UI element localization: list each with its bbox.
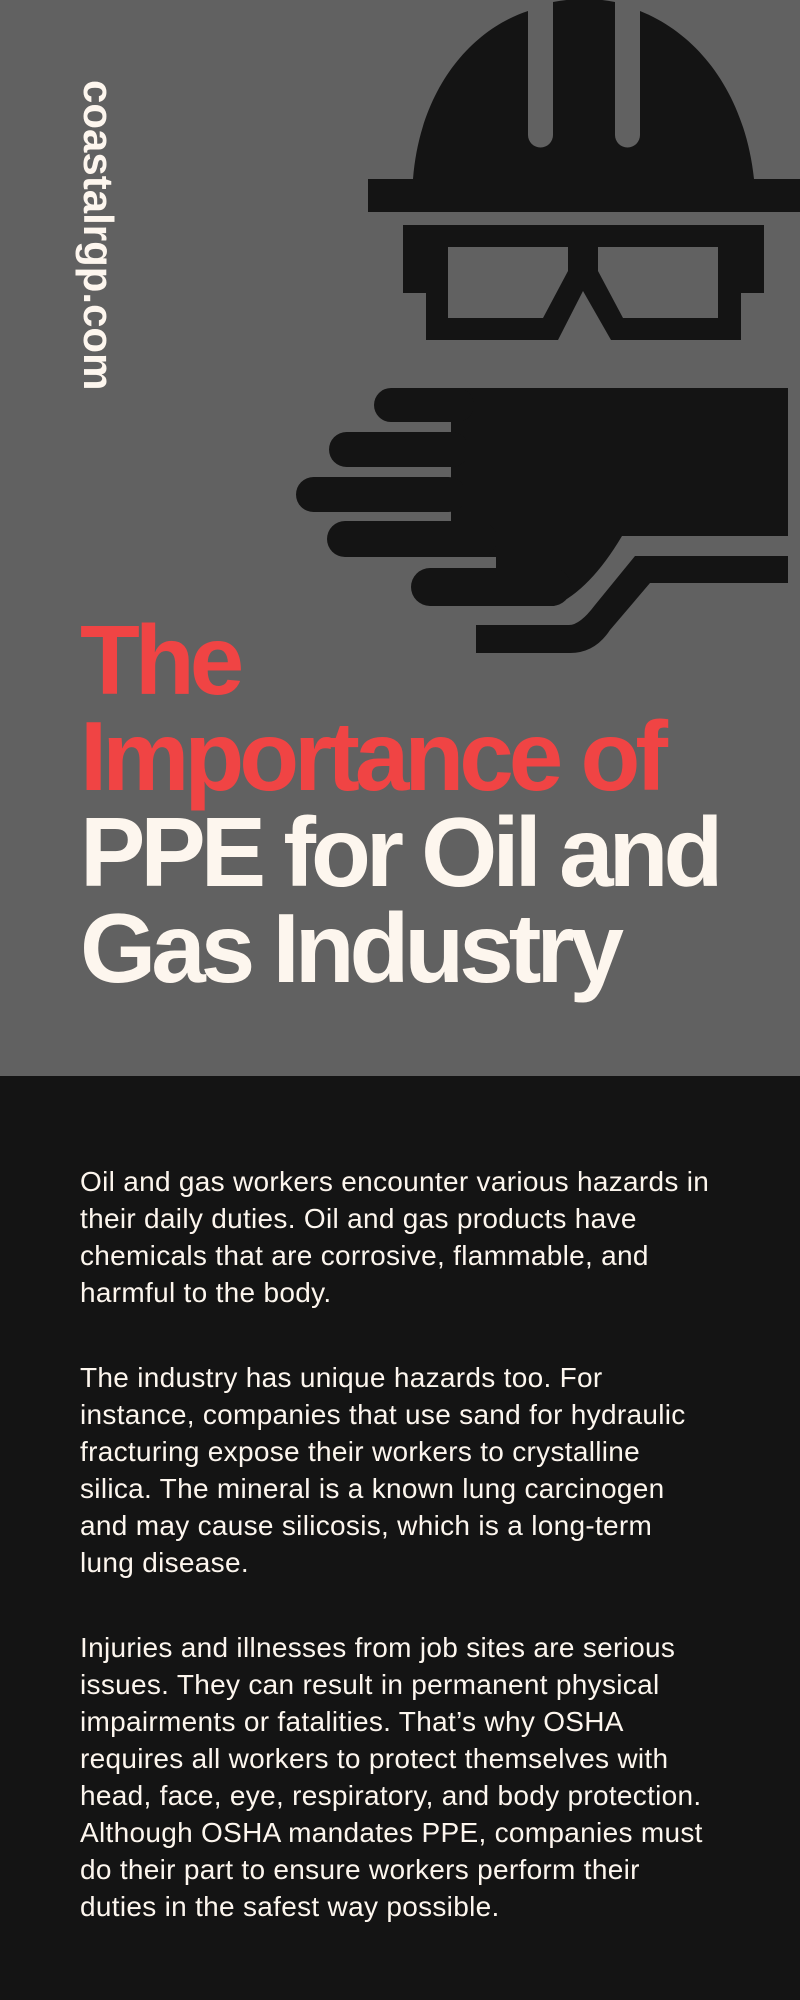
paragraph 3: Although OSHA mandates PPE, companies must — [80, 1817, 703, 1848]
title: PPE for Oil and — [80, 797, 718, 907]
icon: worker with helmet, goggles and glove — [296, 0, 800, 653]
paragraph 2: lung disease. — [80, 1547, 249, 1578]
paragraph 1: Oil and gas workers encounter various hazards in — [80, 1166, 709, 1197]
paragraph 2: and may cause silicosis, which is a long-term — [80, 1510, 652, 1541]
paragraph 1: chemicals that are corrosive, flammable, and — [80, 1240, 649, 1271]
paragraph 3: duties in the safest way possible. — [80, 1891, 500, 1922]
title: Gas Industry — [80, 893, 619, 1003]
paragraph 3: head, face, eye, respiratory, and body protection. — [80, 1780, 702, 1811]
paragraph 2: fracturing expose their workers to crystalline — [80, 1436, 640, 1467]
icon: goggles — [403, 225, 764, 340]
paragraph 3: requires all workers to protect themselves with — [80, 1743, 668, 1774]
icon: glove — [296, 388, 788, 653]
title: Importance of — [80, 701, 663, 811]
paragraph 3: Injuries and illnesses from job sites are serious — [80, 1632, 675, 1663]
header panel — [0, 0, 800, 1076]
title — [80, 605, 718, 1003]
vertical website text: coastalrgp.com — [75, 80, 122, 390]
paragraph 1 — [80, 1166, 709, 1308]
paragraph 2: instance, companies that use sand for hydraulic — [80, 1399, 686, 1430]
paragraph 2: The industry has unique hazards too. For — [80, 1362, 603, 1393]
paragraph 2 — [80, 1362, 686, 1578]
paragraph 3: issues. They can result in permanent physical — [80, 1669, 660, 1700]
paragraph 1: harmful to the body. — [80, 1277, 331, 1308]
paragraph 3: impairments or fatalities. That’s why OSHA — [80, 1706, 624, 1737]
paragraph 3: do their part to ensure workers perform their — [80, 1854, 640, 1885]
icon: helmet — [368, 0, 800, 212]
body text — [80, 1166, 709, 1922]
paragraph 3 — [80, 1632, 703, 1922]
paragraph 1: their daily duties. Oil and gas products have — [80, 1203, 637, 1234]
paragraph 2: silica. The mineral is a known lung carcinogen — [80, 1473, 664, 1504]
title: The — [80, 605, 239, 715]
